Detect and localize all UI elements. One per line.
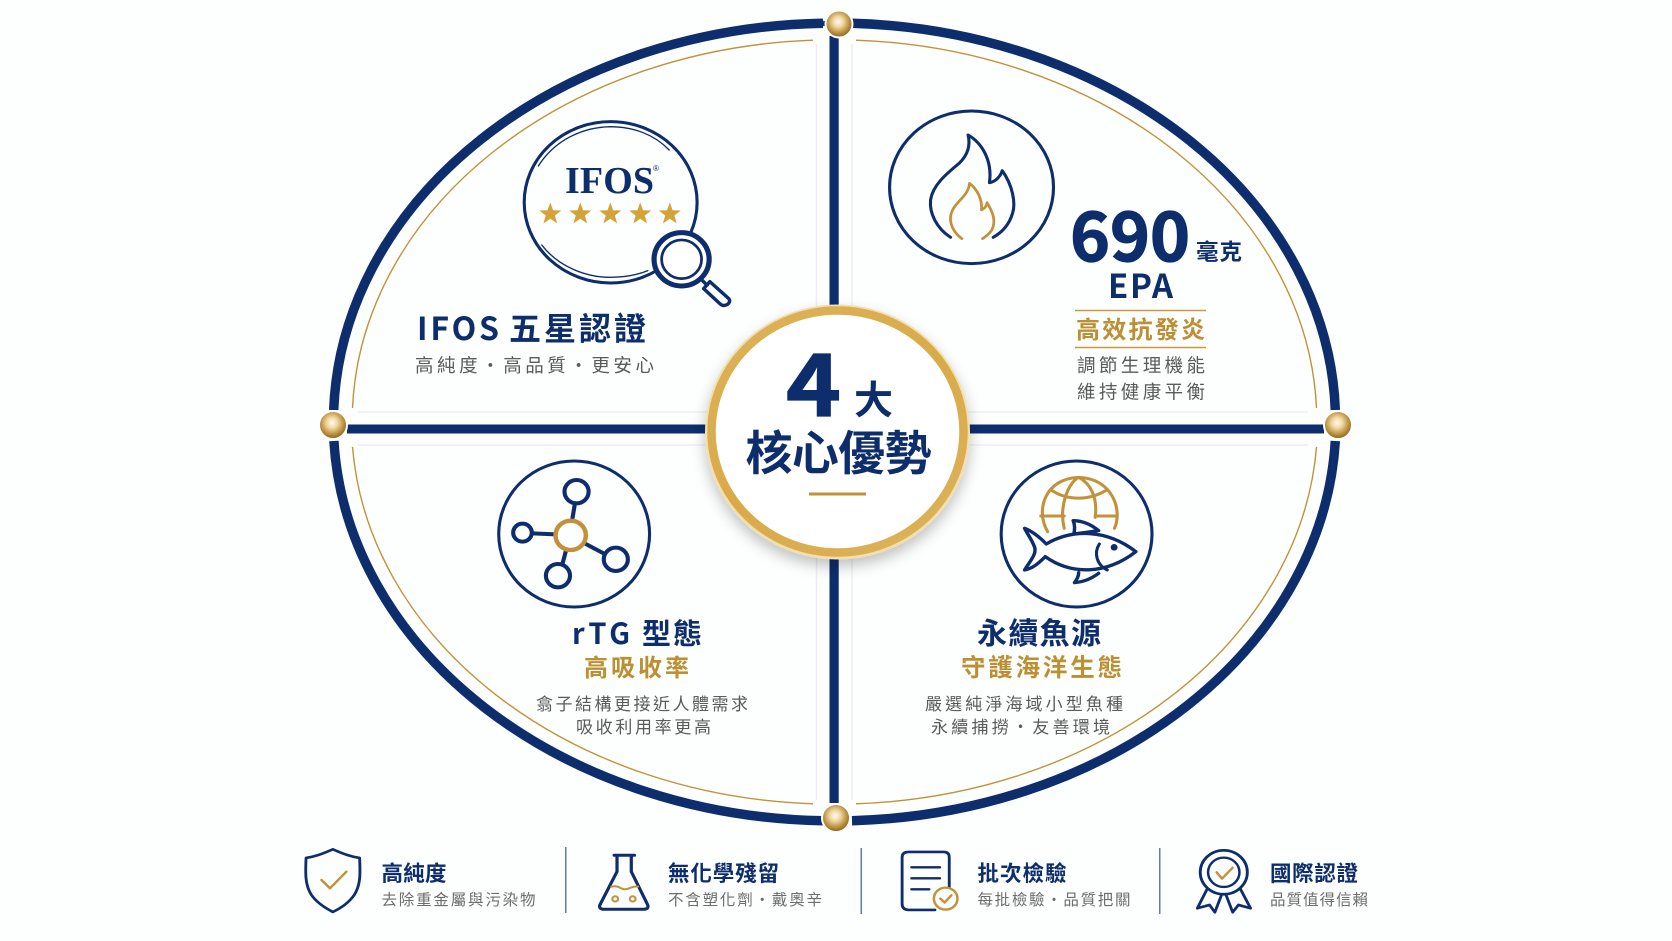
label: 高純度 <box>382 857 446 888</box>
gold rules <box>1075 310 1206 348</box>
description: 高純度‧高品質‧更安心 <box>415 352 654 378</box>
gold subheading: 高吸收率 <box>584 648 689 683</box>
690: 690 <box>1070 185 1190 281</box>
description: 翕子結構更接近人體需求 <box>536 690 748 715</box>
oval frame <box>334 23 1335 821</box>
unit: 毫克 <box>1196 235 1242 267</box>
大: 大 <box>854 370 893 426</box>
divider <box>1159 848 1160 914</box>
heading: IFOS <box>417 304 499 350</box>
panel: EPA <box>890 111 1242 405</box>
divider <box>565 847 566 913</box>
gold rule <box>809 492 866 496</box>
center title: 核心優勢 <box>746 415 932 484</box>
label: 批次檢驗 <box>978 857 1066 888</box>
icon: shield <box>306 849 360 912</box>
bottom feature: international certification <box>1197 850 1368 912</box>
sublabel: 品質值得信賴 <box>1270 888 1368 910</box>
panel: rTG: 吸收利用率更高 <box>576 713 711 738</box>
gold subheading: 高效抗發炎 <box>1076 310 1205 345</box>
icon: IFOS seal with magnifier <box>524 122 730 305</box>
bottom feature: no chemical residue <box>600 855 822 910</box>
icon: document check <box>902 852 957 910</box>
label: 國際認證 <box>1270 857 1358 888</box>
panel: EPA: 維持健康平衡 <box>1077 378 1205 404</box>
bottom feature: high purity <box>306 849 536 912</box>
gold junction balls <box>319 10 1352 832</box>
sublabel: 每批檢驗‧品質把關 <box>978 888 1130 910</box>
description: 調節生理機能 <box>1077 352 1205 378</box>
panel: sustainable fish: 永續捕撈‧友善環境 <box>931 713 1110 738</box>
number 4: 4 <box>786 320 841 441</box>
icon: award ribbon <box>1197 850 1251 912</box>
EPA: EPA <box>1108 260 1174 308</box>
center badge <box>705 304 970 560</box>
five stars <box>539 202 681 223</box>
IFOS wordmark: IFOS <box>565 160 654 202</box>
heading: 型態 <box>642 611 702 653</box>
divider <box>860 848 862 914</box>
icon: IFOS seal with magnifier: ® <box>653 164 659 173</box>
panel: IFOS <box>415 122 730 378</box>
heading: 五星認證 <box>509 304 646 350</box>
label: 無化學殘留 <box>668 857 779 888</box>
panel: sustainable fish <box>925 461 1152 738</box>
gold subheading: 守護海洋生態 <box>961 649 1122 684</box>
bottom feature: batch testing <box>902 852 1130 910</box>
icon: flask <box>600 855 648 909</box>
sublabel: 去除重金屬與污染物 <box>382 888 536 910</box>
icon: molecule <box>499 461 650 607</box>
heading: rTG <box>572 611 630 653</box>
panel: rTG <box>499 461 748 738</box>
sublabel: 不含塑化劑‧戴奧辛 <box>668 888 822 910</box>
description: 嚴選純淨海域小型魚種 <box>925 690 1123 715</box>
heading: 永續魚源 <box>977 609 1101 653</box>
icon: flame <box>890 111 1054 264</box>
icon: fish and globe <box>1001 461 1152 607</box>
cross dividers <box>347 36 1324 803</box>
